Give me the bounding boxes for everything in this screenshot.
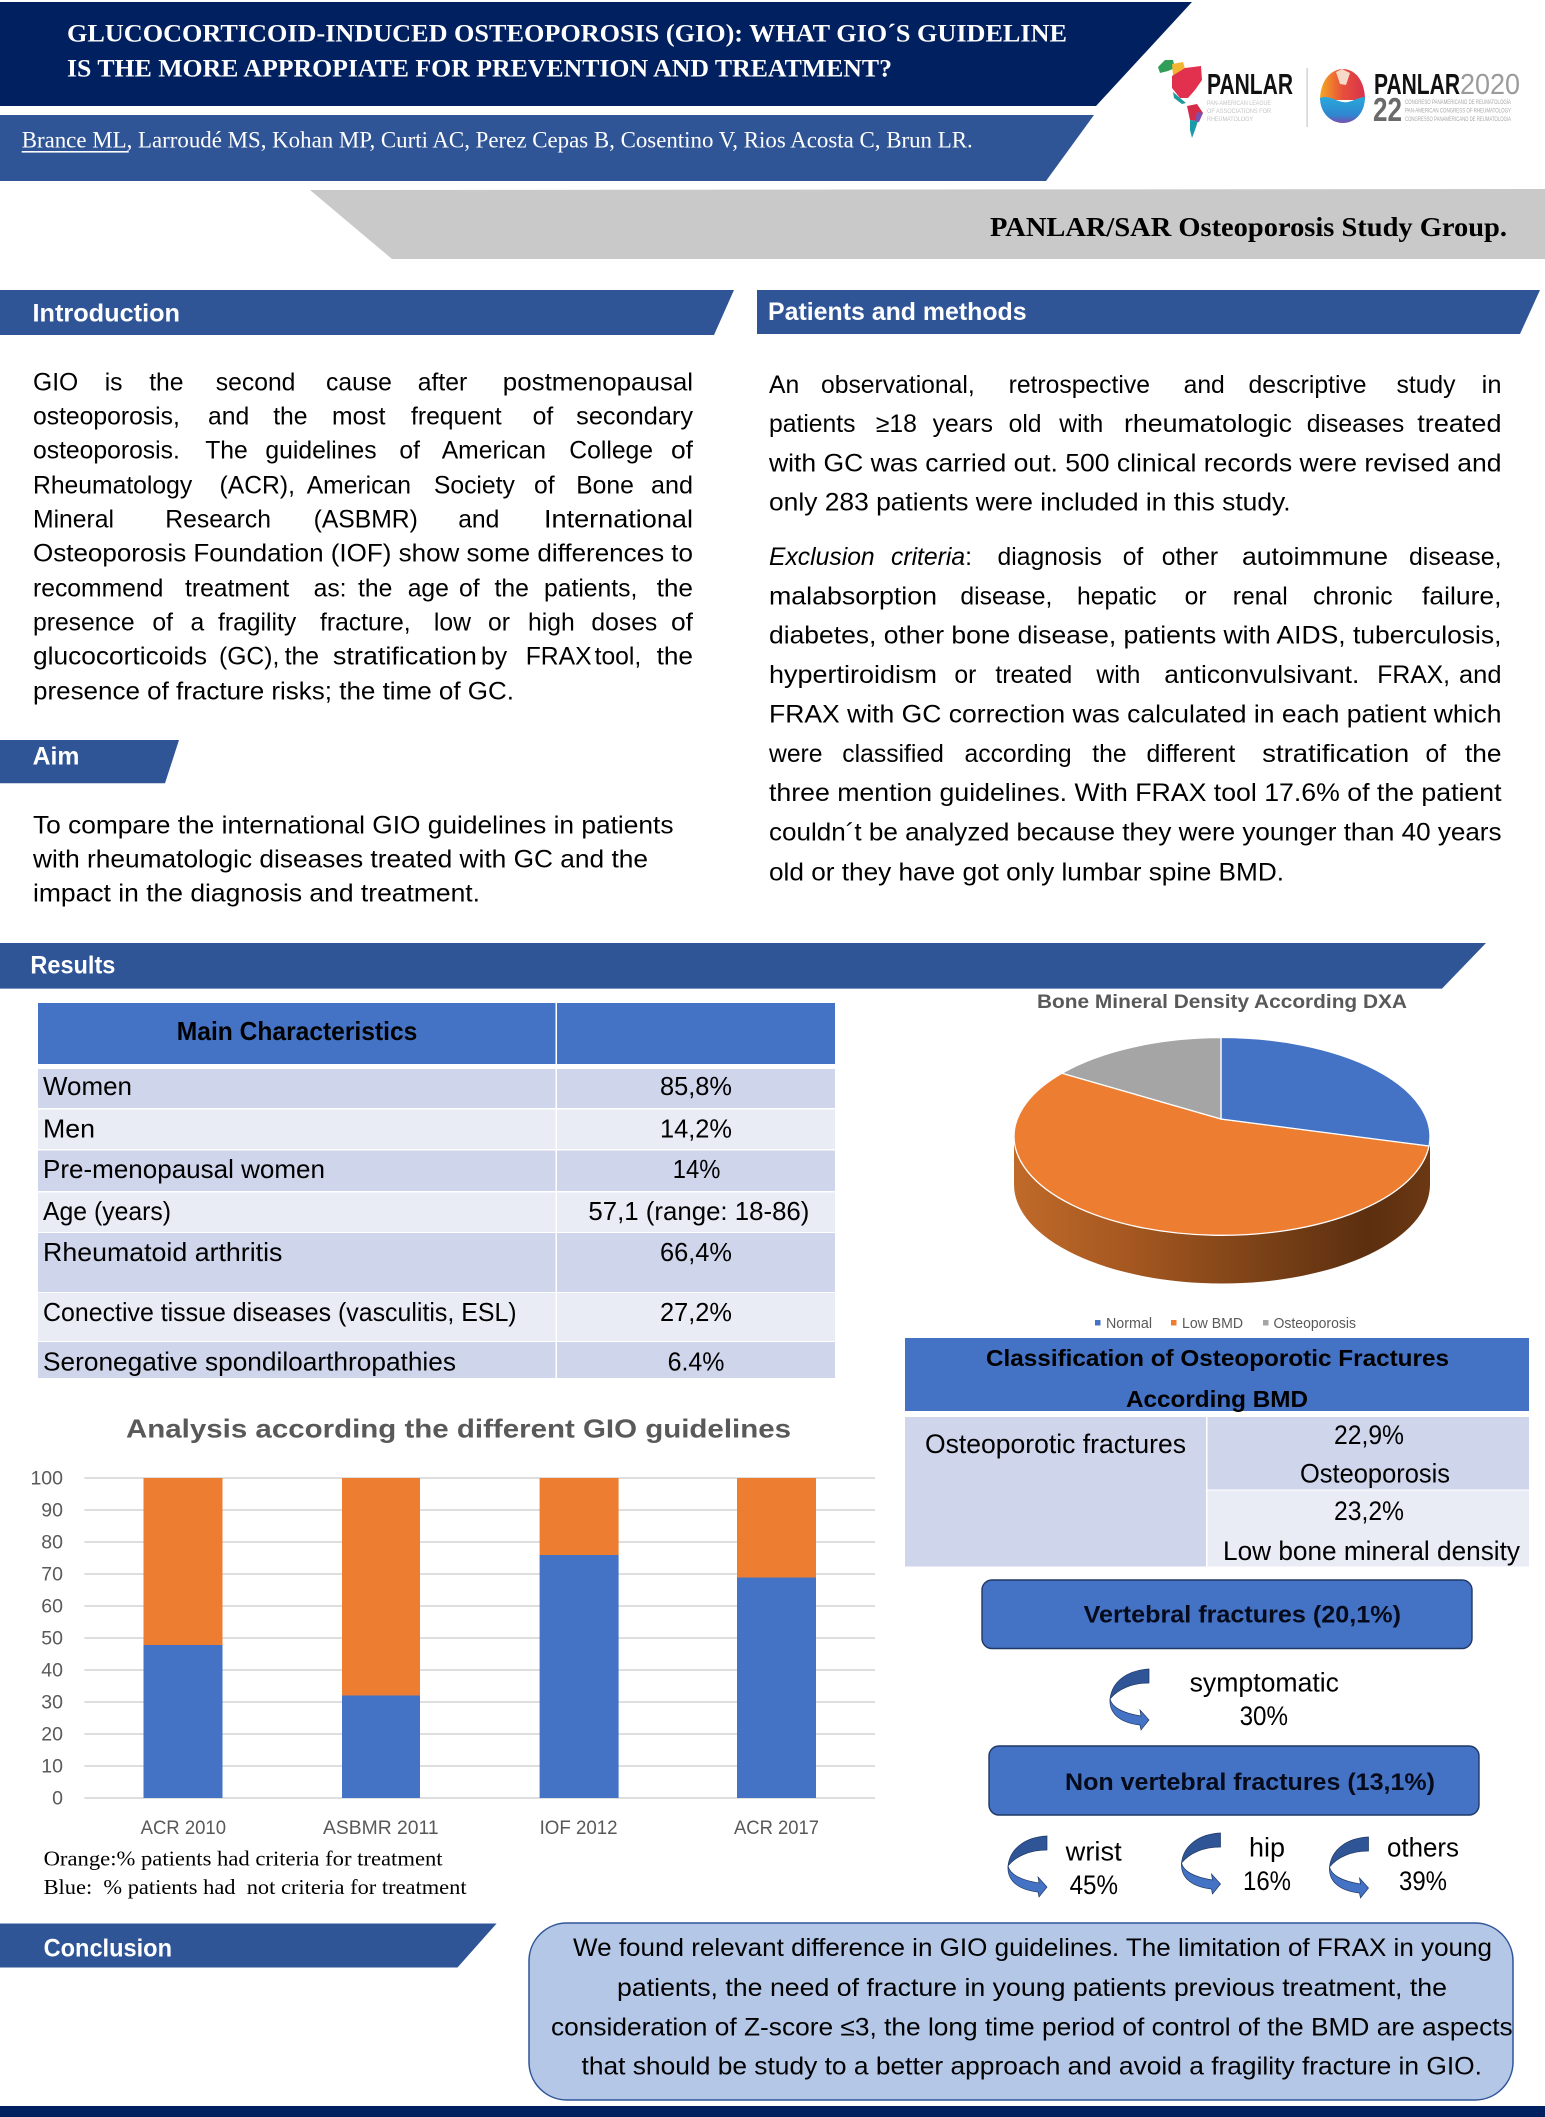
bar: IOF 2012: IOF 2012 bbox=[540, 1817, 618, 1839]
text block: exclusion criteria: renal bbox=[1233, 583, 1288, 610]
text block: introduction: glucocorticoids bbox=[33, 643, 207, 670]
heading: Aim bbox=[0, 740, 179, 783]
text block: introduction: Mineral bbox=[33, 507, 114, 534]
heading: Conclusion bbox=[0, 1924, 497, 1968]
text block: introduction: tool, bbox=[595, 643, 641, 670]
text block: aim: To compare the international GIO guidelines in patients bbox=[33, 812, 674, 839]
text block: introduction: the bbox=[657, 643, 693, 670]
y axis labels: 40 bbox=[41, 1660, 63, 1682]
text block: introduction: after bbox=[418, 370, 467, 397]
text block: introduction: and bbox=[458, 507, 499, 534]
text block: introduction: of bbox=[671, 437, 693, 464]
text block: introduction: doses bbox=[591, 610, 657, 637]
text block: exclusion criteria: or bbox=[1185, 583, 1207, 610]
text block: introduction: osteoporosis, bbox=[33, 403, 180, 430]
text block: exclusion criteria: diagnosis bbox=[998, 544, 1102, 571]
text block: exclusion criteria: different bbox=[1146, 741, 1235, 768]
y axis labels bbox=[30, 1468, 63, 1810]
heading: Aim: Aim bbox=[33, 742, 79, 770]
text block: introduction bbox=[33, 370, 694, 705]
callout: conclusion text: that should be study to a better approach and avoid a fragility fracture in GIO. bbox=[582, 2053, 1482, 2081]
authors banner bbox=[0, 115, 1094, 181]
table row: Men: 14,2% bbox=[660, 1113, 732, 1143]
title text: IS THE MORE APPROPIATE FOR PREVENTION AND TREATMENT? bbox=[67, 56, 892, 83]
text block: exclusion criteria: three mention guidelines. With FRAX tool 17.6% of the patient bbox=[769, 780, 1502, 807]
bar: ACR 2017 bbox=[734, 1478, 819, 1839]
text block: exclusion criteria: disease, bbox=[1409, 544, 1502, 571]
text block: introduction: and bbox=[651, 472, 693, 499]
text block: exclusion criteria: classified bbox=[842, 741, 944, 768]
heading: Introduction bbox=[0, 290, 734, 335]
icon: congress emblem bbox=[1320, 69, 1365, 123]
cell: low bone mineral density value bbox=[1208, 1490, 1529, 1566]
row label: osteoporotic fractures: Osteoporotic fractures bbox=[925, 1429, 1186, 1459]
label: symptomatic 30%: 30% bbox=[1240, 1701, 1288, 1731]
text block: exclusion criteria: failure, bbox=[1422, 583, 1502, 610]
text block: introduction: the bbox=[358, 576, 392, 603]
text block: introduction: by bbox=[481, 643, 508, 670]
pie legend bbox=[1095, 1316, 1356, 1332]
pie side wall bbox=[1014, 1136, 1430, 1284]
text block: introduction: postmenopausal bbox=[503, 370, 693, 397]
text block: introduction: (ACR), bbox=[220, 472, 295, 499]
text block: exclusion criteria: Exclusion bbox=[769, 544, 875, 571]
text block: introduction: of bbox=[671, 610, 693, 637]
table row: Age: 57,1 (range: 18-86) bbox=[588, 1196, 809, 1226]
table row: Pre-menopausal women: Pre-menopausal women bbox=[43, 1154, 325, 1184]
table row: Conective tissue diseases: 27,2% bbox=[660, 1297, 732, 1327]
table header bbox=[38, 1003, 835, 1064]
text block: study description: observational, bbox=[821, 372, 975, 399]
table header bbox=[905, 1338, 1529, 1412]
text block: exclusion criteria: disease, bbox=[960, 583, 1052, 610]
label: symptomatic 30% bbox=[1190, 1668, 1339, 1731]
cell: osteoporosis value: Osteoporosis bbox=[1300, 1458, 1450, 1488]
heading: Results: Results bbox=[30, 951, 115, 979]
arrow: to others bbox=[1329, 1837, 1368, 1898]
text block: exclusion criteria: hypertiroidism bbox=[769, 662, 937, 689]
logos: PANLAR and PANLAR 2020: PAN-AMERICAN LEAGUE bbox=[1207, 100, 1272, 107]
logos: PANLAR and PANLAR 2020: PANLAR bbox=[1207, 69, 1293, 101]
text block: study description bbox=[768, 372, 1502, 517]
title text bbox=[67, 21, 1067, 83]
logos: PANLAR and PANLAR 2020: 22 bbox=[1373, 91, 1402, 128]
text block: study description: ≥18 bbox=[876, 411, 917, 438]
text block: exclusion criteria: : bbox=[965, 544, 972, 571]
text block: aim: with rheumatologic diseases treated with GC and the bbox=[32, 846, 648, 873]
table header: Classification of Osteoporotic Fractures bbox=[986, 1345, 1449, 1371]
text block: study description: retrospective bbox=[1009, 372, 1150, 399]
text block: study description: An bbox=[769, 372, 799, 399]
bar: ACR 2017: ACR 2017 bbox=[734, 1817, 819, 1839]
y axis labels: 30 bbox=[41, 1692, 63, 1714]
text block: introduction: fragility bbox=[218, 610, 297, 637]
table row: Seronegative spondiloarthropathies: Seronegative spondiloarthropathies bbox=[43, 1347, 456, 1377]
text block: exclusion criteria: the bbox=[1465, 741, 1502, 768]
table row: Women: 85,8% bbox=[660, 1071, 732, 1101]
text block: introduction: fracture, bbox=[320, 610, 411, 637]
bar: ASBMR 2011 bbox=[323, 1478, 439, 1839]
text block: introduction: a bbox=[190, 610, 204, 637]
text block: study description: treated bbox=[1417, 411, 1502, 438]
box: vertebral fractures: Vertebral fractures (20,1%) bbox=[1084, 1602, 1401, 1629]
pie slice: low BMD bbox=[1014, 1073, 1429, 1235]
logos: PANLAR and PANLAR 2020: PANLAR bbox=[1374, 69, 1460, 101]
text block: introduction: or bbox=[488, 610, 510, 637]
pie chart: bone mineral density bbox=[1014, 992, 1430, 1332]
chart note: colour key: Orange:% patients had criteria for treatment bbox=[44, 1846, 443, 1870]
table row: Seronegative spondiloarthropathies: 6.4% bbox=[668, 1347, 724, 1377]
text block: introduction: College bbox=[569, 437, 653, 464]
pie legend: Normal bbox=[1106, 1316, 1152, 1332]
label: wrist 45% bbox=[1065, 1837, 1122, 1900]
bar: ACR 2010: ACR 2010 bbox=[141, 1817, 226, 1839]
table row: Age: Age (years) bbox=[43, 1196, 171, 1226]
table header: Main Characteristics bbox=[177, 1016, 417, 1046]
text block: introduction: frequent bbox=[411, 403, 502, 430]
text block: introduction: Society bbox=[434, 472, 516, 499]
chart title: Analysis according the different GIO guidelines bbox=[126, 1414, 791, 1444]
text block: study description: old bbox=[1009, 411, 1042, 438]
text block: introduction: (ASBMR) bbox=[314, 507, 418, 534]
chart note: colour key: Blue: % patients had not criteria for treatment bbox=[44, 1875, 467, 1899]
bar: IOF 2012 bbox=[540, 1478, 619, 1839]
row label: osteoporotic fractures bbox=[905, 1417, 1206, 1566]
cell: low bone mineral density value: 23,2% bbox=[1334, 1496, 1404, 1526]
table row: Conective tissue diseases: Conective tissue diseases (vasculitis, ESL) bbox=[43, 1297, 517, 1327]
pie legend: Low BMD bbox=[1182, 1316, 1243, 1332]
table row: Pre-menopausal women: 14% bbox=[673, 1154, 720, 1184]
text block: introduction: secondary bbox=[576, 403, 694, 430]
table: classification of osteoporotic fractures bbox=[905, 1338, 1529, 1566]
text block: exclusion criteria: hepatic bbox=[1077, 583, 1157, 610]
text block: introduction: the bbox=[273, 403, 308, 430]
text block: introduction: and bbox=[208, 403, 249, 430]
title text: GLUCOCORTICOID-INDUCED OSTEOPOROSIS (GIO): WHAT GIO´S GUIDELINE bbox=[67, 21, 1067, 48]
text block: study description: and bbox=[1184, 372, 1225, 399]
text block: introduction: The bbox=[205, 437, 248, 464]
text block: introduction: presence of fracture risks; the time of GC. bbox=[33, 678, 514, 705]
text block: study description: only 283 patients were included in this study. bbox=[769, 490, 1291, 517]
text block: exclusion criteria: chronic bbox=[1313, 583, 1393, 610]
text block: exclusion criteria: according bbox=[964, 741, 1072, 768]
text block: introduction: patients, bbox=[544, 576, 637, 603]
chart title: Bone Mineral Density According DXA bbox=[1037, 992, 1407, 1013]
text block: introduction: high bbox=[528, 610, 575, 637]
table row: Men bbox=[38, 1110, 835, 1149]
y axis labels: 10 bbox=[41, 1756, 63, 1778]
text block: introduction: (GC), bbox=[219, 643, 279, 670]
text block: introduction: treatment bbox=[185, 576, 289, 603]
text block: exclusion criteria: other bbox=[1162, 544, 1218, 571]
panel: aim bbox=[0, 740, 674, 908]
text block: study description: rheumatologic bbox=[1124, 411, 1292, 438]
callout: conclusion text: consideration of Z-score ≤3, the long time period of control of the BMD are aspects bbox=[551, 2013, 1513, 2041]
logos: PANLAR and PANLAR 2020: RHEUMATOLOGY bbox=[1207, 116, 1254, 123]
logos: PANLAR and PANLAR 2020 bbox=[1158, 60, 1520, 138]
pie slice: osteoporosis bbox=[1062, 1038, 1221, 1119]
text block: exclusion criteria: old or they have got only lumbar spine BMD. bbox=[769, 859, 1284, 886]
y axis labels: 70 bbox=[41, 1564, 63, 1586]
text block: introduction: age bbox=[408, 576, 449, 603]
text block: introduction: presence bbox=[33, 610, 135, 637]
text block: exclusion criteria: anticonvulsivant. bbox=[1164, 662, 1359, 689]
y axis labels: 50 bbox=[41, 1628, 63, 1650]
text block: exclusion criteria: or bbox=[954, 662, 976, 689]
text block: introduction: is bbox=[105, 370, 123, 397]
text block: study description: descriptive bbox=[1248, 372, 1367, 399]
table row: Women bbox=[38, 1069, 835, 1108]
text block: introduction: FRAX bbox=[526, 643, 592, 670]
y axis labels: 80 bbox=[41, 1532, 63, 1554]
text block: introduction: Rheumatology bbox=[33, 472, 193, 499]
text block: study description: patients bbox=[769, 411, 855, 438]
text block: aim: impact in the diagnosis and treatment. bbox=[33, 881, 480, 908]
pie slice: normal bbox=[1221, 1037, 1430, 1146]
text block: exclusion criteria: were bbox=[768, 741, 823, 768]
icon: americas map bbox=[1158, 60, 1203, 138]
y axis labels: 20 bbox=[41, 1724, 63, 1746]
pie legend: Osteoporosis bbox=[1274, 1316, 1356, 1332]
table row: Rheumatoid arthritis bbox=[38, 1233, 835, 1292]
text block: exclusion criteria: FRAX, bbox=[1377, 662, 1450, 689]
table row: Conective tissue diseases bbox=[38, 1293, 835, 1341]
heading: Patients and methods bbox=[757, 290, 1540, 334]
authors banner: Brance ML, Larroudé MS, Kohan MP, Curti AC, Perez Cepas B, Cosentino V, Rios Acosta C, Brun LR. bbox=[22, 128, 973, 153]
text block: introduction: of bbox=[534, 472, 555, 499]
text block: study description: with GC was carried out. 500 clinical records were revised and bbox=[768, 450, 1502, 477]
label: others 39% bbox=[1387, 1833, 1459, 1896]
y axis labels: 100 bbox=[30, 1468, 63, 1490]
label: wrist 45%: wrist bbox=[1065, 1837, 1122, 1867]
label: symptomatic 30%: symptomatic bbox=[1190, 1668, 1339, 1698]
text block: introduction: Bone bbox=[576, 472, 634, 499]
text block: introduction: the bbox=[494, 576, 529, 603]
table row: Women: Women bbox=[43, 1071, 132, 1101]
text block: introduction: GIO bbox=[33, 370, 78, 397]
heading: Patients and methods: Patients and methods bbox=[768, 298, 1027, 326]
bar chart: analysis according the different GIO guidelines bbox=[30, 1414, 875, 1839]
text block: exclusion criteria: autoimmune bbox=[1242, 544, 1388, 571]
label: others 39%: 39% bbox=[1399, 1866, 1447, 1896]
text block: study description: in bbox=[1482, 372, 1502, 399]
study group banner bbox=[310, 189, 1545, 259]
panel: patients and methods bbox=[757, 290, 1540, 886]
y axis labels: 60 bbox=[41, 1596, 63, 1618]
text block: introduction: second bbox=[216, 370, 295, 397]
text block: exclusion criteria: the bbox=[1092, 741, 1127, 768]
text block: exclusion criteria bbox=[768, 544, 1502, 886]
text block: introduction: of bbox=[152, 610, 173, 637]
text block: exclusion criteria: and bbox=[1459, 662, 1502, 689]
box: non vertebral fractures: Non vertebral fractures (13,1%) bbox=[1065, 1769, 1435, 1796]
table row: Age bbox=[38, 1192, 835, 1232]
callout: conclusion text bbox=[529, 1923, 1513, 2100]
table row: Pre-menopausal women bbox=[38, 1150, 835, 1191]
table row: Men: Men bbox=[43, 1113, 95, 1143]
text block: introduction: low bbox=[434, 610, 471, 637]
chart note: colour key bbox=[44, 1846, 467, 1899]
text block: exclusion criteria: with bbox=[1095, 662, 1140, 689]
text block: introduction: American bbox=[307, 472, 411, 499]
y axis labels: 90 bbox=[41, 1500, 63, 1522]
table row: Seronegative spondiloarthropathies bbox=[38, 1342, 835, 1378]
box: vertebral fractures bbox=[982, 1580, 1472, 1648]
heading: Introduction: Introduction bbox=[32, 300, 180, 328]
text block: introduction: as: bbox=[314, 576, 347, 603]
cell: osteoporosis value: 22,9% bbox=[1334, 1420, 1404, 1450]
text block: introduction: Research bbox=[165, 507, 271, 534]
text block: introduction: osteoporosis. bbox=[33, 437, 180, 464]
text block: study description: with bbox=[1058, 411, 1103, 438]
text block: exclusion criteria: couldn´t be analyzed because they were younger than 40 years bbox=[769, 819, 1502, 846]
text block: introduction: cause bbox=[326, 370, 392, 397]
text block: introduction: stratification bbox=[333, 643, 477, 670]
text block: introduction: most bbox=[332, 403, 386, 430]
text block: introduction: the bbox=[285, 643, 319, 670]
table row: Rheumatoid arthritis: Rheumatoid arthritis bbox=[43, 1237, 282, 1267]
label: hip 16% bbox=[1243, 1833, 1291, 1896]
logos: PANLAR and PANLAR 2020: OF ASSOCIATIONS FOR bbox=[1207, 108, 1271, 115]
title banner bbox=[0, 2, 1192, 106]
text block: introduction: International bbox=[544, 507, 693, 534]
text block: exclusion criteria: FRAX with GC correction was calculated in each patient which bbox=[769, 702, 1502, 728]
box: non vertebral fractures bbox=[989, 1746, 1479, 1815]
callout: conclusion text: We found relevant difference in GIO guidelines. The limitation of FRAX in young bbox=[573, 1934, 1492, 1962]
arrow: to wrist bbox=[1008, 1836, 1047, 1897]
text block: exclusion criteria: stratification bbox=[1262, 741, 1409, 768]
panel: introduction bbox=[0, 290, 734, 705]
text block: exclusion criteria: diabetes, other bone disease, patients with AIDS, tuberculosis, bbox=[769, 623, 1502, 650]
text block: introduction: of bbox=[399, 437, 420, 464]
text block: introduction: the bbox=[149, 370, 184, 397]
text block: exclusion criteria: criteria bbox=[891, 544, 965, 571]
text block: introduction: American bbox=[442, 437, 546, 464]
text block: exclusion criteria: of bbox=[1426, 741, 1446, 768]
text block: introduction: the bbox=[657, 576, 693, 603]
text block: study description: years bbox=[933, 411, 993, 438]
y axis labels: 0 bbox=[52, 1788, 63, 1810]
label: others 39%: others bbox=[1387, 1833, 1459, 1863]
logos: PANLAR and PANLAR 2020: 2020 bbox=[1460, 69, 1520, 101]
table row: Rheumatoid arthritis: 66,4% bbox=[660, 1237, 732, 1267]
text block: exclusion criteria: treated bbox=[995, 662, 1072, 689]
text block: study description: diseases bbox=[1307, 411, 1404, 438]
cell: osteoporosis value bbox=[1208, 1417, 1529, 1490]
text block: introduction: recommend bbox=[33, 576, 163, 603]
label: wrist 45%: 45% bbox=[1070, 1870, 1118, 1900]
arrow: vertebral to symptomatic bbox=[1110, 1669, 1149, 1730]
table: main characteristics bbox=[38, 1003, 835, 1378]
text block: introduction: guidelines bbox=[265, 437, 377, 464]
bar: ACR 2010 bbox=[141, 1478, 226, 1839]
text block: aim bbox=[32, 812, 674, 908]
label: hip 16%: 16% bbox=[1243, 1866, 1291, 1896]
table header: According BMD bbox=[1126, 1386, 1308, 1412]
heading: Conclusion: Conclusion bbox=[44, 1934, 172, 1962]
heading: Results bbox=[0, 943, 1486, 989]
text block: study description: study bbox=[1396, 372, 1456, 399]
arrow: to hip bbox=[1181, 1833, 1220, 1894]
cell: low bone mineral density value: Low bone mineral density bbox=[1223, 1536, 1521, 1566]
text block: introduction: of bbox=[533, 403, 553, 430]
text block: exclusion criteria: of bbox=[1123, 544, 1143, 571]
callout: conclusion text: patients, the need of fracture in young patients previous treatment, the bbox=[617, 1974, 1447, 2002]
text block: exclusion criteria: malabsorption bbox=[769, 583, 937, 610]
bar: ASBMR 2011: ASBMR 2011 bbox=[323, 1817, 439, 1839]
text block: introduction: of bbox=[459, 576, 480, 603]
label: hip 16%: hip bbox=[1249, 1833, 1285, 1863]
text block: introduction: Osteoporosis Foundation (IOF) show some differences to bbox=[33, 540, 693, 567]
footer bar bbox=[0, 2106, 1545, 2117]
study group banner: PANLAR/SAR Osteoporosis Study Group. bbox=[990, 211, 1507, 242]
